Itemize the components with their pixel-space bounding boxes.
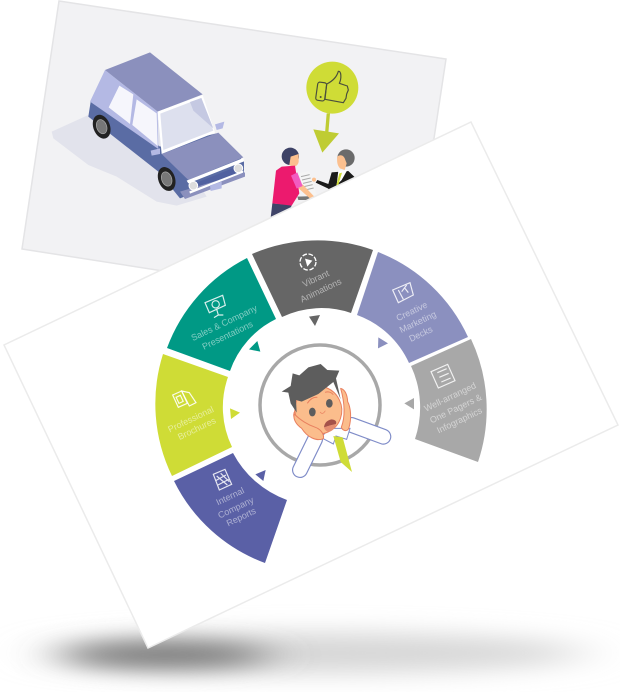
pointer arrows	[230, 315, 414, 481]
panel: back card with car sale scene	[22, 1, 446, 271]
segment: Sales & Company Presentations: Presentations	[201, 319, 255, 352]
segment: Creative Marketing Decks	[357, 252, 468, 363]
segment: Professional Brochures: Brochures	[176, 415, 218, 442]
segment: Well-arranged One Pagers & Infographics: Well-arranged	[423, 380, 478, 414]
segment: Professional Brochures	[155, 354, 232, 476]
segment: Internal Company Reports	[174, 453, 287, 563]
segment: Well-arranged One Pagers & Infographics: One Pagers &	[428, 392, 483, 425]
center ring	[260, 345, 380, 465]
segment: Vibrant Animations: Vibrant	[301, 268, 331, 289]
segment: Creative Marketing Decks: Decks	[407, 324, 435, 344]
segment: Creative Marketing Decks: Creative	[395, 300, 429, 323]
car illustration	[52, 52, 245, 206]
segment: Well-arranged One Pagers & Infographics	[411, 339, 487, 462]
segment: Professional Brochures: Professional	[166, 404, 215, 434]
segment: Well-arranged One Pagers & Infographics: Infographics	[435, 405, 484, 435]
two people exchanging a document	[270, 148, 356, 223]
segment: Vibrant Animations	[252, 240, 373, 317]
segment: Internal Company Reports: Company	[216, 495, 256, 520]
icon: worried businessman	[282, 364, 383, 472]
thumbs up badge with arrow	[306, 62, 358, 153]
ground shadow	[45, 633, 585, 673]
segment: Internal Company Reports: Reports	[225, 505, 258, 528]
segment: Sales & Company Presentations	[167, 258, 276, 371]
segment: Internal Company Reports: Internal	[214, 485, 246, 507]
panel: front white card	[4, 122, 618, 648]
segment: Sales & Company Presentations: Sales & Company	[190, 303, 259, 343]
segment: Vibrant Animations: Animations	[299, 276, 343, 304]
segment: Creative Marketing Decks: Marketing	[398, 309, 438, 335]
